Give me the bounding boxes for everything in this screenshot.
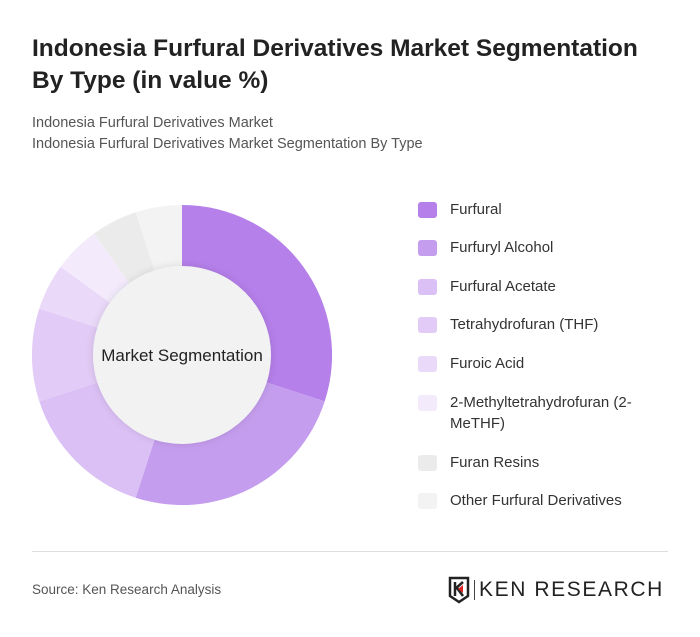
- legend: Furfural: [450, 201, 502, 218]
- subtitle: Indonesia Furfural Derivatives Market: [32, 115, 273, 131]
- legend: Furfural Acetate: [450, 278, 556, 295]
- source: Source: Ken Research Analysis: [32, 582, 221, 597]
- legend: [418, 201, 632, 509]
- legend: MeTHF): [450, 415, 505, 432]
- legend: 2-Methyltetrahydrofuran (2-: [450, 394, 632, 411]
- legend: Other Furfural Derivatives: [450, 492, 622, 509]
- legend: Furan Resins: [450, 454, 539, 471]
- subtitle: Indonesia Furfural Derivatives Market Segmentation By Type: [32, 136, 423, 152]
- logo: KEN RESEARCH: [479, 578, 664, 601]
- title: Indonesia Furfural Derivatives Market Segmentation By Type (in value %): [32, 35, 638, 94]
- subtitle: [32, 115, 423, 152]
- donut chart: Market Segmentation: [101, 346, 263, 365]
- legend: Furoic Acid: [450, 355, 524, 372]
- legend: Furfuryl Alcohol: [450, 239, 553, 256]
- legend: Tetrahydrofuran (THF): [450, 316, 598, 333]
